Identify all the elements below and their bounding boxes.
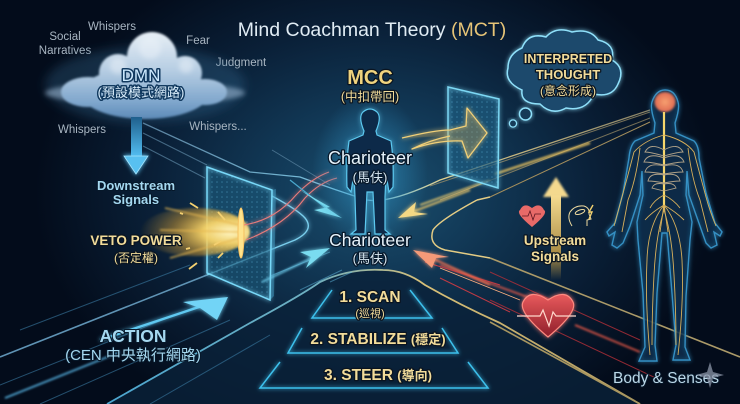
cloud: DMN: [45, 32, 245, 123]
arrow: cyan lower: [262, 248, 330, 282]
step labels: [310, 289, 446, 384]
arrow: cyan upper: [290, 180, 342, 218]
floating words around cloud: Fear: [186, 35, 210, 47]
icon: sparkle: [696, 362, 724, 388]
cloud label: DMN: [122, 66, 160, 85]
action label: ACTION: [99, 326, 167, 346]
floating words around cloud: Whispers...: [189, 121, 247, 133]
action label: [65, 326, 201, 364]
thought panel: [448, 87, 499, 188]
body label: Body & Senses: [613, 370, 719, 387]
mcc label: (中扣帶回): [341, 89, 399, 104]
red arrow to charioteer: [413, 250, 490, 285]
floating words around cloud: Whispers: [58, 124, 106, 136]
veto power label: [90, 233, 182, 265]
bubble text: INTERPRETED: [524, 52, 612, 66]
charioteer label lower: (馬伕): [353, 251, 387, 266]
red signal waves through veto panel: [244, 172, 337, 240]
ribs: [644, 146, 684, 191]
brain: [654, 92, 676, 112]
action label: (CEN 中央執行網路): [65, 347, 201, 364]
mcc label: MCC: [347, 67, 393, 89]
upstream label: [524, 233, 586, 264]
step 1 outline: [312, 290, 432, 318]
mcc label: [341, 67, 399, 104]
gold arrow through thought panel: [402, 108, 487, 158]
upstream label: Upstream: [524, 233, 586, 248]
road: top lines from the cloud to centre and gold path: [143, 110, 650, 290]
step 3 outline: [260, 362, 488, 388]
road: red body path: [425, 258, 740, 404]
thought bubble: (意念形成): [540, 83, 596, 98]
step labels: 2. STABILIZE (穩定): [310, 331, 446, 348]
thought bubble: THOUGHT: [536, 67, 600, 82]
label: downstream signals: [97, 178, 175, 207]
spine and nerves: [614, 112, 716, 355]
body outline: [607, 90, 722, 361]
cloud: DMN: (預設模式網路): [98, 85, 184, 100]
floating words around cloud: Social: [49, 31, 81, 43]
arrow: upstream: [543, 177, 569, 280]
road: action path and centre curve: [0, 196, 640, 404]
floating words around cloud: Judgment: [216, 57, 267, 69]
veto power label: VETO POWER: [90, 233, 182, 248]
step labels: 1. SCAN: [339, 289, 401, 306]
step labels: (巡視): [355, 306, 385, 320]
big heart icon: [517, 294, 576, 337]
step labels: 3. STEER (導向): [324, 367, 432, 384]
icon: small heart: [519, 205, 545, 227]
charioteer label upper: Charioteer: [328, 148, 412, 168]
label: downstream signals: Signals: [113, 192, 159, 207]
gold arrow to charioteer: [398, 190, 470, 218]
charioteer label upper: [328, 148, 412, 185]
figure: charioteer: [312, 94, 428, 250]
floating words around cloud: Narratives: [39, 45, 91, 57]
action arrow: [100, 297, 228, 340]
bubble circles: [520, 108, 532, 120]
arrow: downstream from cloud: [123, 117, 149, 175]
charioteer label lower: [329, 230, 411, 266]
veto panel: [207, 167, 276, 300]
veto barrier slit: [238, 208, 244, 258]
figure: body with nervous system: [607, 90, 722, 361]
road: gold thought path: [420, 112, 650, 258]
icon: head with bolt: [569, 205, 593, 226]
upstream label: Signals: [531, 249, 579, 264]
veto burst: [140, 203, 250, 269]
veto power label: (否定權): [114, 250, 158, 265]
step 2 outline: [288, 328, 458, 353]
title: Mind Coachman Theory (MCT): [238, 19, 506, 41]
floating words around cloud: [39, 21, 267, 136]
charioteer label lower: Charioteer: [329, 230, 411, 250]
floating words around cloud: Whispers: [88, 21, 136, 33]
thought bubble: [507, 30, 621, 127]
label: downstream signals: Downstream: [97, 178, 175, 193]
charioteer label upper: (馬伕): [353, 170, 387, 185]
pyramid steps: [260, 290, 488, 388]
